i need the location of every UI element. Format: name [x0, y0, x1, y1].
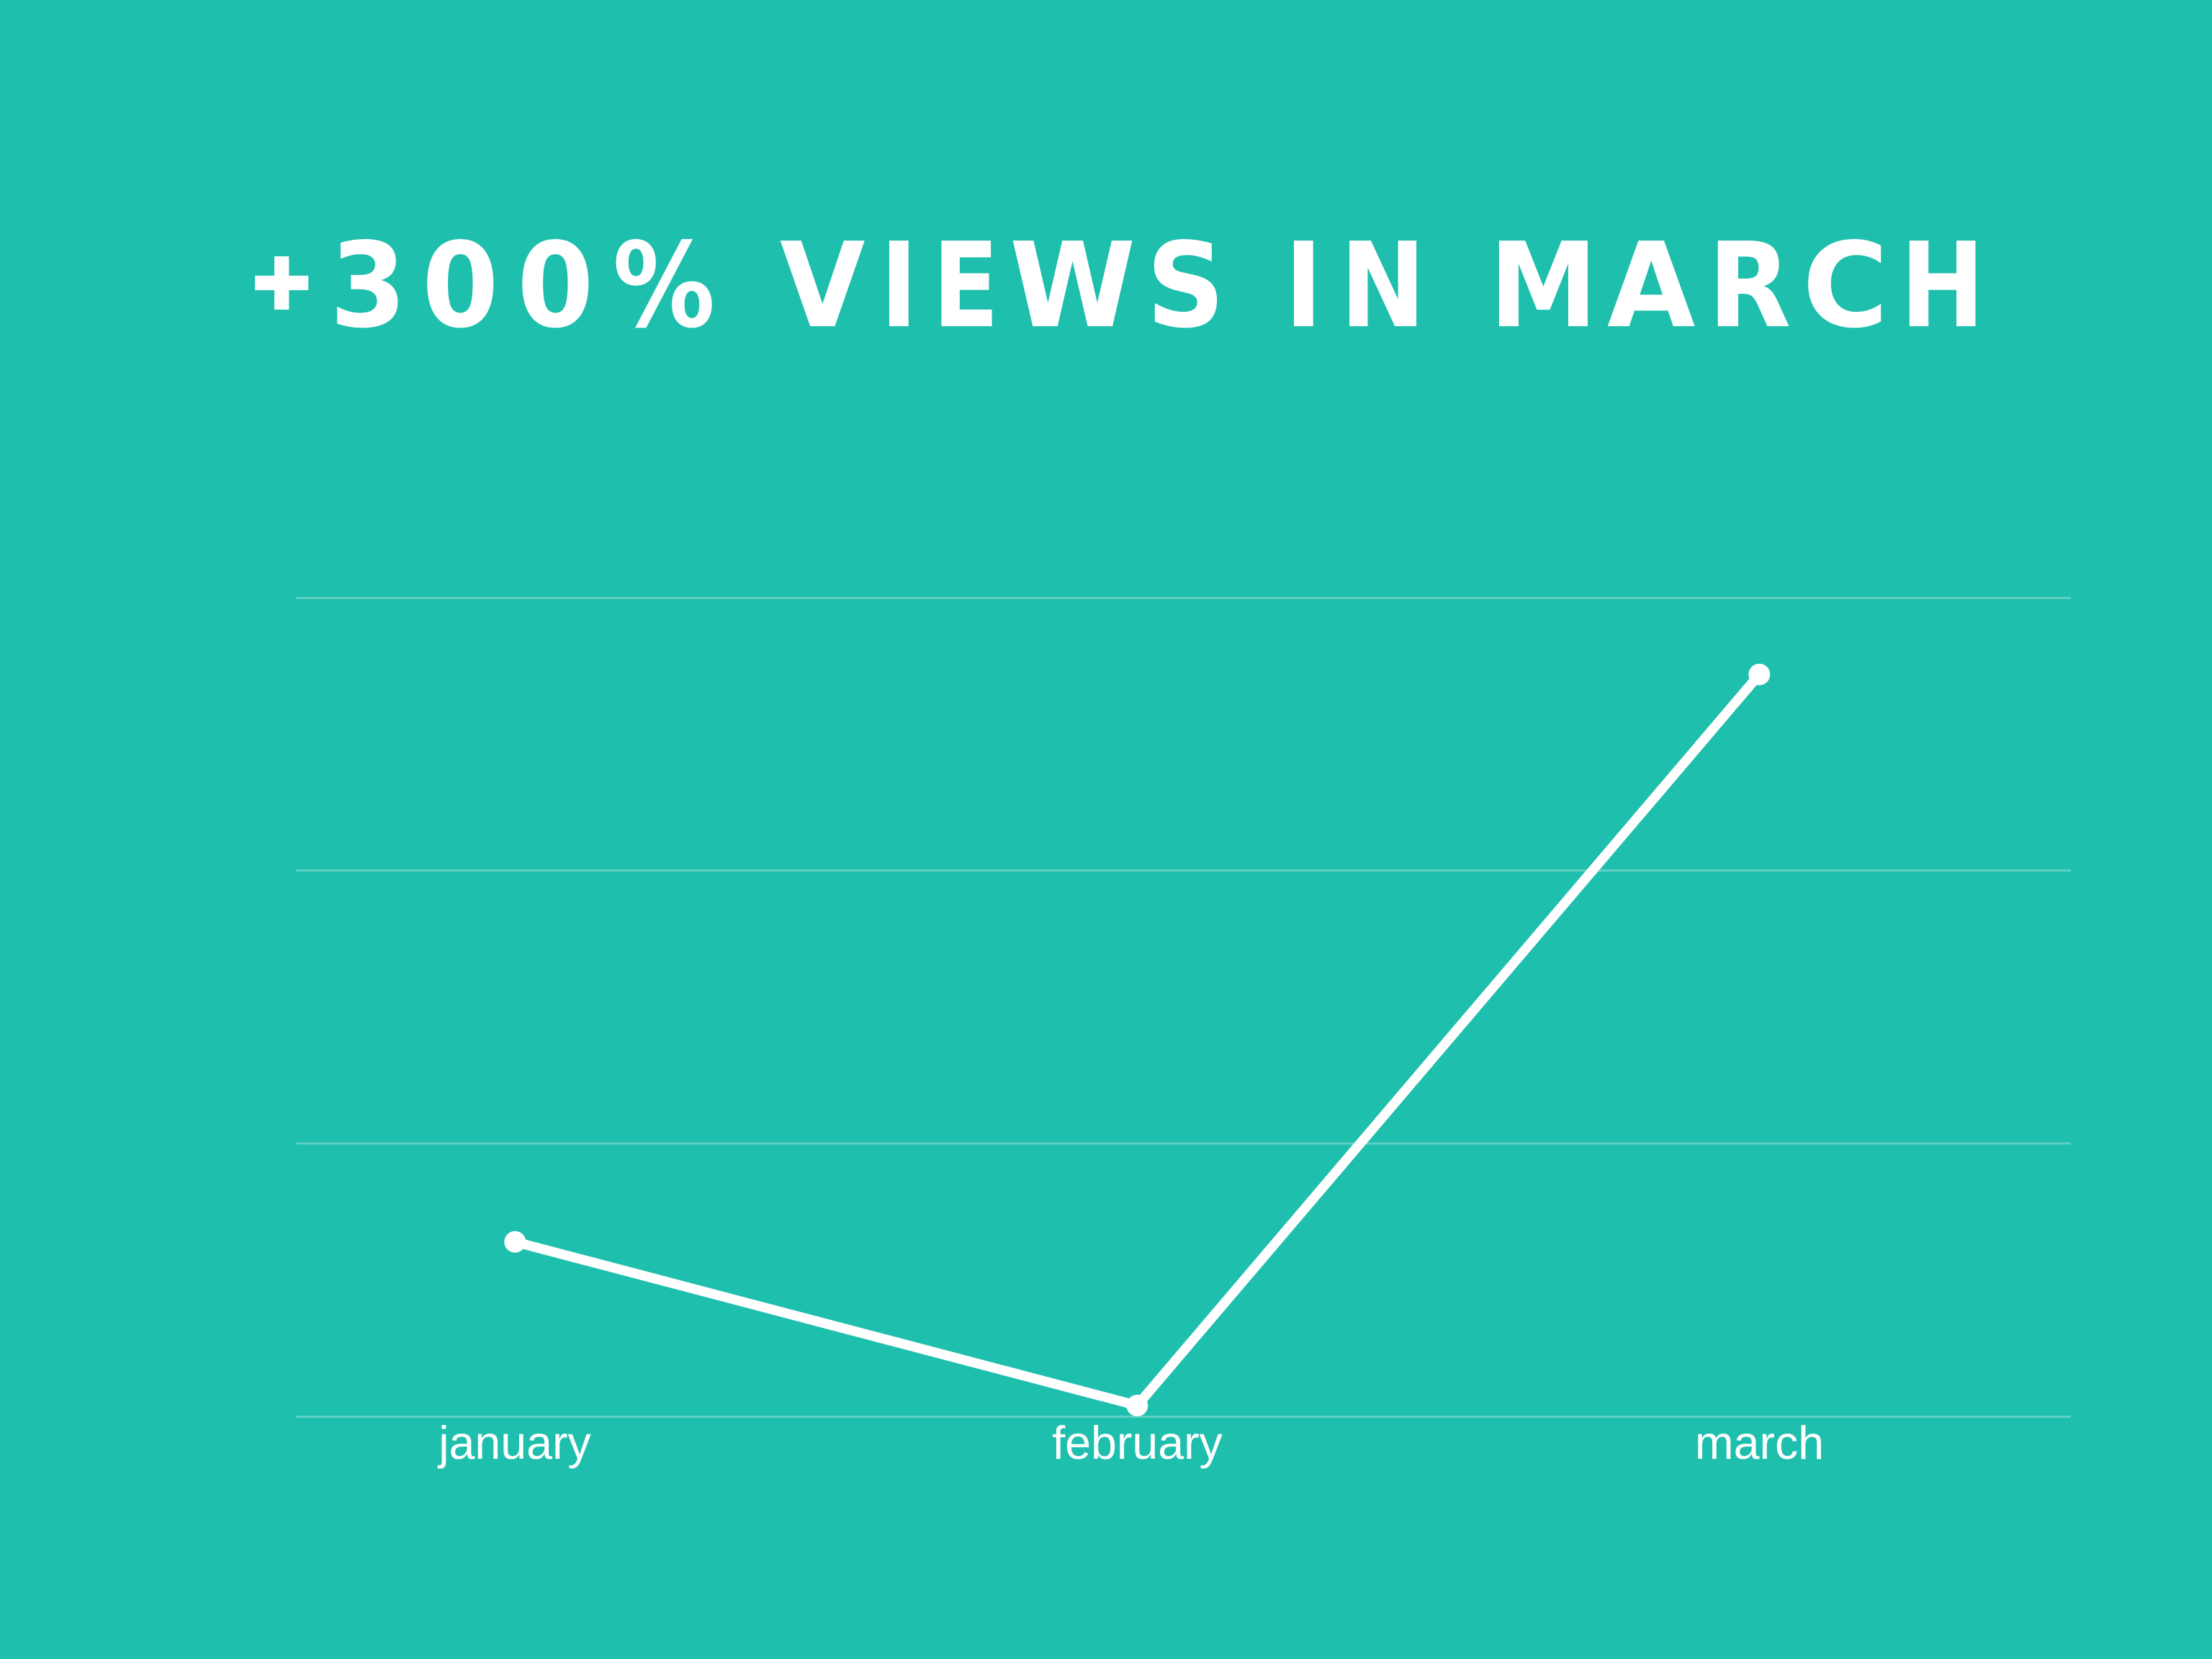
- title: I: [880, 218, 918, 354]
- title: N: [1340, 218, 1426, 354]
- title: %: [612, 218, 715, 354]
- axis label: january: january: [437, 1417, 592, 1469]
- title: E: [932, 218, 999, 354]
- title: +: [250, 237, 313, 325]
- title: H: [1900, 218, 1985, 354]
- title: I: [1285, 218, 1323, 354]
- title: S: [1146, 218, 1225, 354]
- data point: february: [1126, 1395, 1148, 1416]
- data point: january: [504, 1231, 526, 1253]
- title: R: [1708, 218, 1791, 354]
- axis label: march: march: [1695, 1417, 1824, 1469]
- axis label: february: february: [1052, 1417, 1223, 1469]
- title: [250, 218, 1985, 354]
- title: A: [1607, 218, 1695, 354]
- title: W: [1010, 218, 1136, 354]
- title: V: [780, 218, 866, 354]
- title: 0: [422, 218, 498, 354]
- title: 0: [517, 218, 593, 354]
- title: C: [1802, 218, 1889, 354]
- title: 3: [330, 218, 407, 354]
- data line: views by month: [515, 675, 1759, 1406]
- data point: march: [1748, 664, 1770, 685]
- title: M: [1489, 218, 1597, 354]
